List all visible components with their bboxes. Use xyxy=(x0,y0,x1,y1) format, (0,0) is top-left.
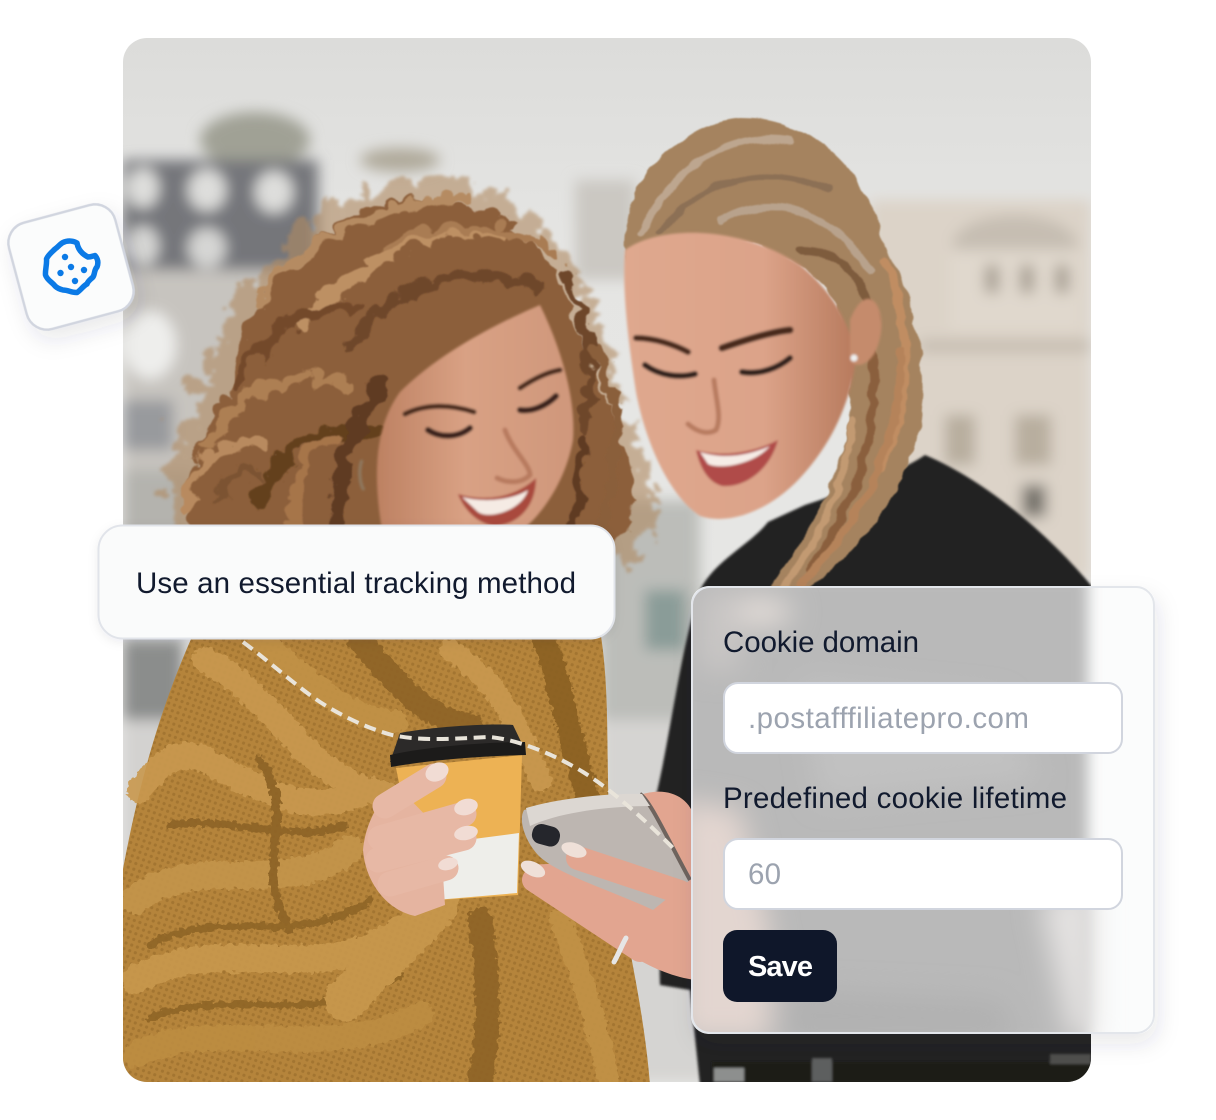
hand behind phone xyxy=(539,792,691,980)
tile body xyxy=(4,200,138,334)
belt and lower jacket detail xyxy=(712,1054,1091,1082)
cookie tile xyxy=(4,200,138,334)
photo: two women looking at a phone xyxy=(120,38,1095,1085)
dashed connector line xyxy=(243,642,673,848)
input: cookie domain: .postafffiliatepro.com xyxy=(748,702,1029,735)
input: cookie lifetime: 60 xyxy=(748,858,781,891)
smartphone xyxy=(522,794,690,910)
left woman: face xyxy=(360,305,573,530)
input: cookie lifetime xyxy=(724,839,1122,909)
coffee cup xyxy=(390,724,526,901)
input: cookie domain xyxy=(724,683,1122,753)
panel: cookie settings form xyxy=(680,575,1155,1045)
callout: essential tracking method: Use an essential tracking method xyxy=(136,567,576,600)
left woman: curly hair xyxy=(159,170,643,555)
label: cookie domain: Cookie domain xyxy=(723,626,919,659)
right woman: black sweater xyxy=(655,455,1095,1085)
button: save: Save xyxy=(748,951,813,983)
icon: cookie xyxy=(45,241,98,293)
label: predefined cookie lifetime: Predefined cookie lifetime xyxy=(723,782,1067,815)
left woman: mustard cable-knit sweater xyxy=(120,630,650,1085)
right woman: face xyxy=(624,233,881,519)
button: save xyxy=(723,930,837,1002)
panel frosted background xyxy=(680,575,1155,1045)
photo background: sky and street xyxy=(123,38,1091,1082)
callout: essential tracking method xyxy=(98,526,614,638)
fingers over phone xyxy=(518,839,680,962)
right woman: hair and ponytail xyxy=(625,118,922,590)
hand holding cup xyxy=(363,759,480,916)
